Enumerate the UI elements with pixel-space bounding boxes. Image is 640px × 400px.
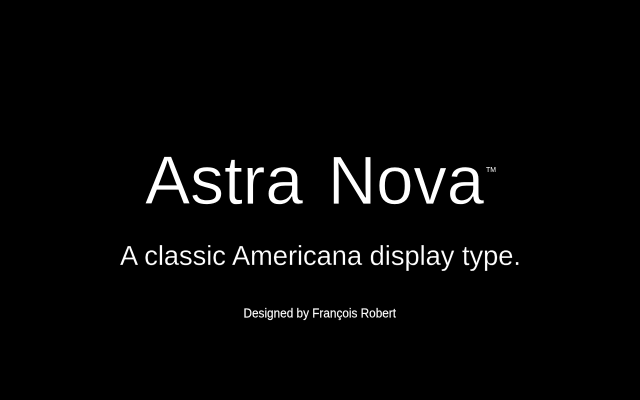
designer credit: Designed by François Robert: [244, 306, 396, 320]
subtitle: A classic Americana display type.: [120, 240, 521, 271]
title: Nova: [328, 142, 485, 219]
title: Astra: [145, 142, 304, 219]
trademark: TM: [486, 167, 496, 174]
